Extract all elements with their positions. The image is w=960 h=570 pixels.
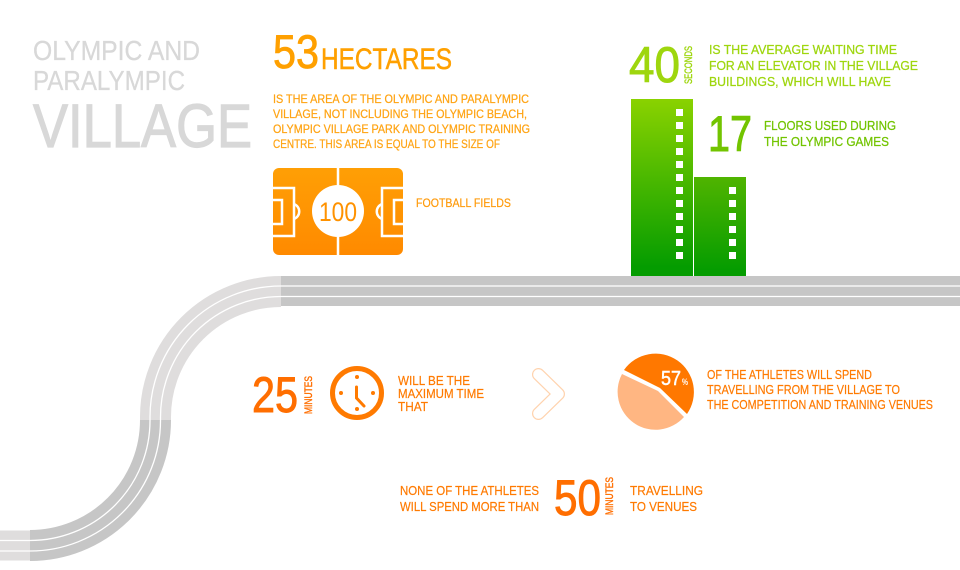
icon: football field: 100 bbox=[319, 197, 357, 227]
stat: 25 minutes: MINUTES bbox=[303, 376, 315, 414]
label: football fields: FOOTBALL FIELDS bbox=[416, 196, 511, 210]
stat: 50 minutes: NONE OF THE ATHLETES bbox=[400, 484, 539, 498]
stat: 50 minutes: TRAVELLING bbox=[630, 484, 703, 498]
stat: 40 seconds: 40 bbox=[629, 37, 680, 93]
stat: 50 minutes bbox=[400, 470, 703, 526]
text: maximum time: THAT bbox=[398, 400, 428, 414]
title: VILLAGE bbox=[33, 92, 252, 160]
stat: 17 floors: THE OLYMPIC GAMES bbox=[764, 135, 889, 149]
arrow: chevron bbox=[538, 374, 558, 414]
stat: 40 seconds bbox=[629, 37, 918, 93]
stat: 53 hectares: CENTRE. THIS AREA IS EQUAL TO THE SIZE OF bbox=[273, 137, 500, 151]
stat: 17 floors: 17 bbox=[708, 106, 752, 162]
buildings bbox=[631, 99, 746, 276]
text: athletes travelling: OF THE ATHLETES WILL SPEND bbox=[707, 368, 872, 382]
text: athletes travelling: TRAVELLING FROM THE VILLAGE TO bbox=[707, 383, 900, 397]
stat: 50 minutes: TO VENUES bbox=[630, 500, 697, 514]
text: maximum time: WILL BE THE bbox=[398, 374, 470, 388]
stat: 50 minutes: MINUTES bbox=[604, 477, 616, 515]
stat: 25 minutes: 25 bbox=[252, 367, 298, 423]
title bbox=[33, 35, 252, 160]
stat: 53 hectares: VILLAGE, NOT INCLUDING THE OLYMPIC BEACH, bbox=[273, 107, 527, 121]
stat: 53 hectares: IS THE AREA OF THE OLYMPIC AND PARALYMPIC bbox=[273, 92, 529, 106]
stat: 40 seconds: FOR AN ELEVATOR IN THE VILLAGE bbox=[709, 59, 918, 73]
stat: 40 seconds: SECONDS bbox=[683, 46, 695, 84]
stat: 53 hectares: OLYMPIC VILLAGE PARK AND OLYMPIC TRAINING bbox=[273, 122, 530, 136]
stat: 53 hectares: HECTARES bbox=[321, 43, 452, 76]
title: PARALYMPIC bbox=[33, 65, 185, 96]
icon: football field bbox=[273, 168, 403, 255]
stat: 40 seconds: BUILDINGS, WHICH WILL HAVE bbox=[709, 75, 891, 89]
stat: 17 floors bbox=[708, 106, 896, 162]
pie chart: 57%: 57 bbox=[661, 368, 681, 390]
stat: 50 minutes: WILL SPEND MORE THAN bbox=[400, 500, 539, 514]
stat: 17 floors: FLOORS USED DURING bbox=[764, 119, 896, 133]
pie chart: 57%: % bbox=[682, 377, 688, 387]
text: maximum time: MAXIMUM TIME bbox=[398, 387, 484, 401]
text: maximum time bbox=[398, 374, 484, 414]
running track bbox=[0, 286, 960, 551]
stat: 53 hectares: 53 bbox=[273, 25, 319, 78]
stat: 50 minutes: 50 bbox=[554, 470, 601, 526]
pie chart: 57% bbox=[618, 354, 694, 430]
stat: 53 hectares bbox=[273, 25, 530, 151]
text: athletes travelling bbox=[707, 368, 933, 412]
icon: clock bbox=[332, 368, 382, 418]
title: OLYMPIC AND bbox=[33, 35, 200, 66]
stat: 40 seconds: IS THE AVERAGE WAITING TIME bbox=[709, 43, 897, 57]
